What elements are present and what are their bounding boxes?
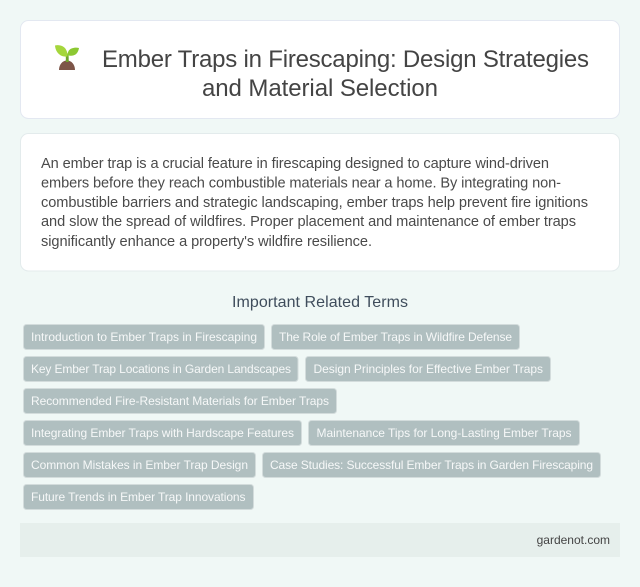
description text: combustible barriers and strategic landscaping, ember traps help prevent fire ignitions [41, 195, 588, 211]
panel: description card [20, 134, 620, 271]
icon: seedling [55, 45, 79, 70]
footer [20, 523, 620, 557]
tag: introduction: Introduction to Ember Traps in Firescaping [31, 330, 257, 344]
tag: design principles: Design Principles for Effective Ember Traps [314, 362, 543, 376]
description text: significantly enhance a property's wildfire resilience. [41, 234, 372, 250]
tag: locations: Key Ember Trap Locations in Garden Landscapes [31, 362, 291, 376]
tag: mistakes [24, 452, 256, 478]
title: Ember Traps in Firescaping: Design Strategies [102, 46, 589, 73]
tag: design principles [306, 356, 550, 382]
tag: case studies: Case Studies: Successful Ember Traps in Garden Firescaping [270, 458, 593, 472]
tag: hardscape [24, 420, 302, 446]
description text: An ember trap is a crucial feature in firescaping designed to capture wind-driven [41, 156, 549, 172]
title: and Material Selection [202, 75, 438, 102]
heading: important related terms: Important Related Terms [232, 294, 408, 311]
description text: and slow the spread of wildfires. Proper placement and maintenance of ember traps [41, 214, 576, 230]
tag: locations [24, 356, 298, 382]
tag: maintenance [308, 420, 580, 446]
tag: future trends: Future Trends in Ember Trap Innovations [31, 490, 246, 504]
tag: materials: Recommended Fire-Resistant Materials for Ember Traps [31, 394, 329, 408]
tag: role: The Role of Ember Traps in Wildfire Defense [279, 330, 512, 344]
tag: future trends [24, 484, 254, 510]
tag: introduction [24, 324, 264, 350]
panel: related term tags [24, 324, 600, 510]
tag: hardscape: Integrating Ember Traps with Hardscape Features [31, 426, 294, 440]
tag: materials [24, 388, 336, 414]
tag: role [272, 324, 520, 350]
footer: gardenot.com [537, 533, 610, 547]
description text [41, 156, 588, 250]
tag: maintenance: Maintenance Tips for Long-Lasting Ember Traps [316, 426, 572, 440]
panel: title card [20, 20, 620, 118]
title [102, 46, 589, 102]
tag: mistakes: Common Mistakes in Ember Trap Design [31, 458, 248, 472]
tag: case studies [262, 452, 600, 478]
description text: embers before they reach combustible materials near a home. By integrating non- [41, 176, 561, 192]
